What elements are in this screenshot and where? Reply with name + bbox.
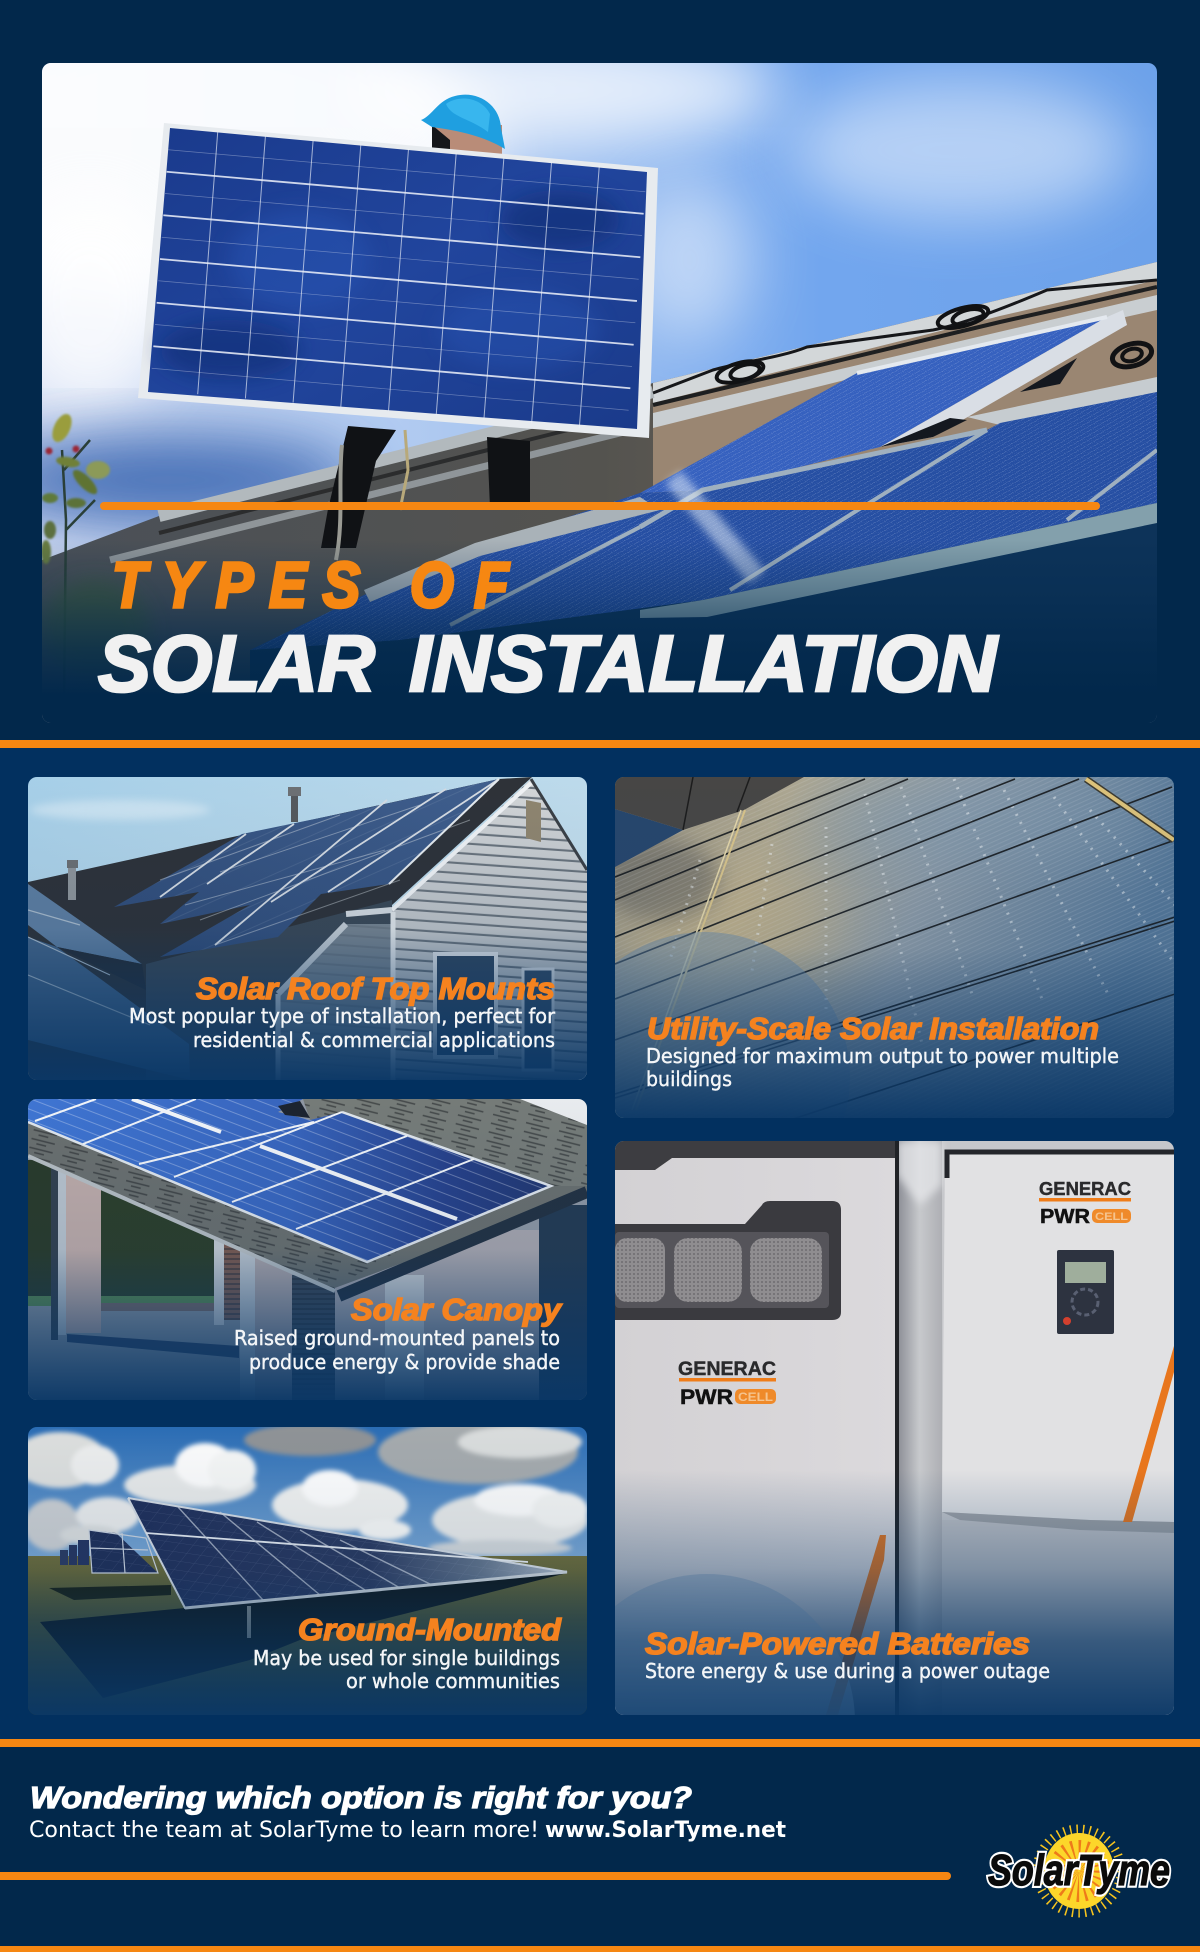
dark eave below array	[250, 503, 1157, 723]
title line: solar installation	[98, 619, 999, 708]
carried solar panel cells	[148, 128, 647, 429]
bottom fade	[615, 1470, 1174, 1715]
lower left roof panels	[28, 884, 142, 964]
busbars	[670, 779, 1175, 1044]
photo: utility-scale panel surface	[560, 777, 1175, 1222]
photo: house with rooftop solar panels	[28, 777, 587, 1080]
installer hard hat and face	[421, 95, 505, 155]
title line: solar installation: SOLAR	[98, 619, 375, 708]
windows	[435, 954, 553, 1070]
roof vents	[67, 787, 301, 900]
hero panel	[42, 63, 1157, 723]
hero bottom fade	[42, 540, 1157, 723]
page background: footer navy	[0, 1743, 1200, 1952]
field	[28, 1556, 587, 1716]
carried solar panel frame	[138, 123, 658, 438]
footer call to action	[29, 1780, 786, 1843]
battery vent grille	[615, 1201, 841, 1320]
SolarTyme logo	[988, 1829, 1170, 1913]
panel: solar-powered batteries	[559, 1141, 1174, 1870]
rooftop array	[250, 392, 1157, 650]
right Generac logo	[1039, 1179, 1131, 1228]
lower gable section	[280, 924, 390, 1062]
left Generac logo: PWR	[680, 1386, 733, 1409]
clouds	[12, 1420, 588, 1556]
description: utility-scale: buildings	[646, 1067, 732, 1091]
title line: types of	[112, 549, 511, 621]
dark roof	[28, 777, 532, 1080]
hero orange rule	[100, 502, 1100, 510]
heading: ground-mounted: Ground-Mounted	[298, 1612, 562, 1647]
right inverter cabinet	[942, 1152, 1174, 1522]
description: roof top mounts: Most popular type of installation, perfect for	[129, 1004, 556, 1028]
panel: utility-scale solar installation	[560, 777, 1175, 1222]
right Generac logo: GENERAC	[1039, 1179, 1131, 1199]
left orange stripe	[826, 1535, 886, 1715]
photo: canopy with solar panels	[28, 1099, 587, 1400]
description: solar canopy: produce energy & provide shade	[249, 1350, 560, 1374]
panel: ground-mounted	[12, 1420, 588, 1716]
footer heading: Wondering which option is right for you?	[30, 1780, 692, 1815]
title line: solar installation: INSTALLATION	[409, 619, 999, 708]
hero photo: installer carrying solar panel on roof	[42, 63, 1157, 723]
roof rails and cables	[110, 262, 1157, 560]
page background: middle blue	[0, 744, 1200, 1740]
panel frame edge	[640, 503, 1157, 618]
logo sun disc	[1044, 1833, 1114, 1909]
tree branches	[42, 412, 141, 647]
right orange stripe	[1123, 1346, 1174, 1522]
inverter display module	[1057, 1250, 1114, 1334]
orange divider above footer	[0, 1739, 1200, 1747]
main solar array	[128, 1498, 567, 1638]
logo sun inner burst	[1063, 1855, 1095, 1887]
description: solar canopy: Raised ground-mounted panels to	[234, 1326, 560, 1350]
footer orange rule	[0, 1872, 951, 1880]
roof surface	[42, 262, 1157, 723]
canopy pillars and walls	[51, 1165, 587, 1400]
description: solar-powered batteries: Store energy & use during a power outage	[645, 1659, 1050, 1683]
translucent circle accent	[559, 1574, 855, 1870]
description: utility-scale: Designed for maximum output to power multiple	[646, 1044, 1119, 1068]
photo: ground-mounted solar array under clouds	[12, 1420, 588, 1716]
heading: solar roof top mounts: Solar Roof Top Mounts	[196, 971, 555, 1006]
canopy solar panels	[28, 1099, 551, 1262]
left Generac logo: GENERAC	[678, 1359, 776, 1380]
description: solar canopy	[234, 1326, 560, 1374]
gable siding wall	[392, 779, 587, 1080]
bottom orange band	[0, 1946, 1200, 1952]
description: ground-mounted	[253, 1646, 560, 1693]
left battery cabinet	[615, 1155, 895, 1715]
orange divider below hero	[0, 740, 1200, 748]
footer contact line: Contact the team at SolarTyme to learn more!	[29, 1818, 539, 1843]
description: roof top mounts	[129, 1004, 556, 1052]
heading: solar canopy: Solar Canopy	[351, 1292, 563, 1327]
description: roof top mounts: residential & commercial applications	[193, 1028, 555, 1052]
right Generac logo: PWR	[1040, 1206, 1091, 1228]
hedge and driveway	[28, 1160, 214, 1311]
left Generac logo: CELL	[738, 1390, 773, 1404]
installer legs	[321, 426, 530, 560]
photo: Generac PWRcell battery units	[559, 1141, 1174, 1870]
distant array rows	[60, 1530, 158, 1573]
description: utility-scale	[646, 1044, 1119, 1091]
roof solar panels	[114, 779, 499, 957]
tilted upper panel	[640, 317, 1107, 493]
logo sun rays	[1037, 1829, 1121, 1913]
panel: solar roof top mounts	[28, 777, 587, 1080]
page background: top navy	[0, 0, 1200, 744]
footer website: www.SolarTyme.net	[545, 1818, 786, 1843]
translucent circle accent	[560, 932, 850, 1222]
title line: types of: TYPES	[112, 549, 360, 621]
description: ground-mounted: May be used for single buildings	[253, 1646, 560, 1670]
array shadows	[49, 1585, 171, 1600]
right Generac logo: CELL	[1095, 1211, 1128, 1223]
gable vent	[526, 800, 541, 842]
title line: types of: OF	[410, 549, 511, 621]
heading: solar-powered batteries: Solar-Powered Batteries	[645, 1626, 1030, 1661]
panel: solar canopy	[28, 1099, 587, 1400]
description: ground-mounted: or whole communities	[346, 1669, 560, 1693]
panel seams	[615, 779, 1175, 1119]
slate roof	[303, 1099, 587, 1186]
left Generac logo	[678, 1359, 776, 1409]
heading: utility-scale solar installation: Utility-Scale Solar Installation	[647, 1011, 1099, 1046]
